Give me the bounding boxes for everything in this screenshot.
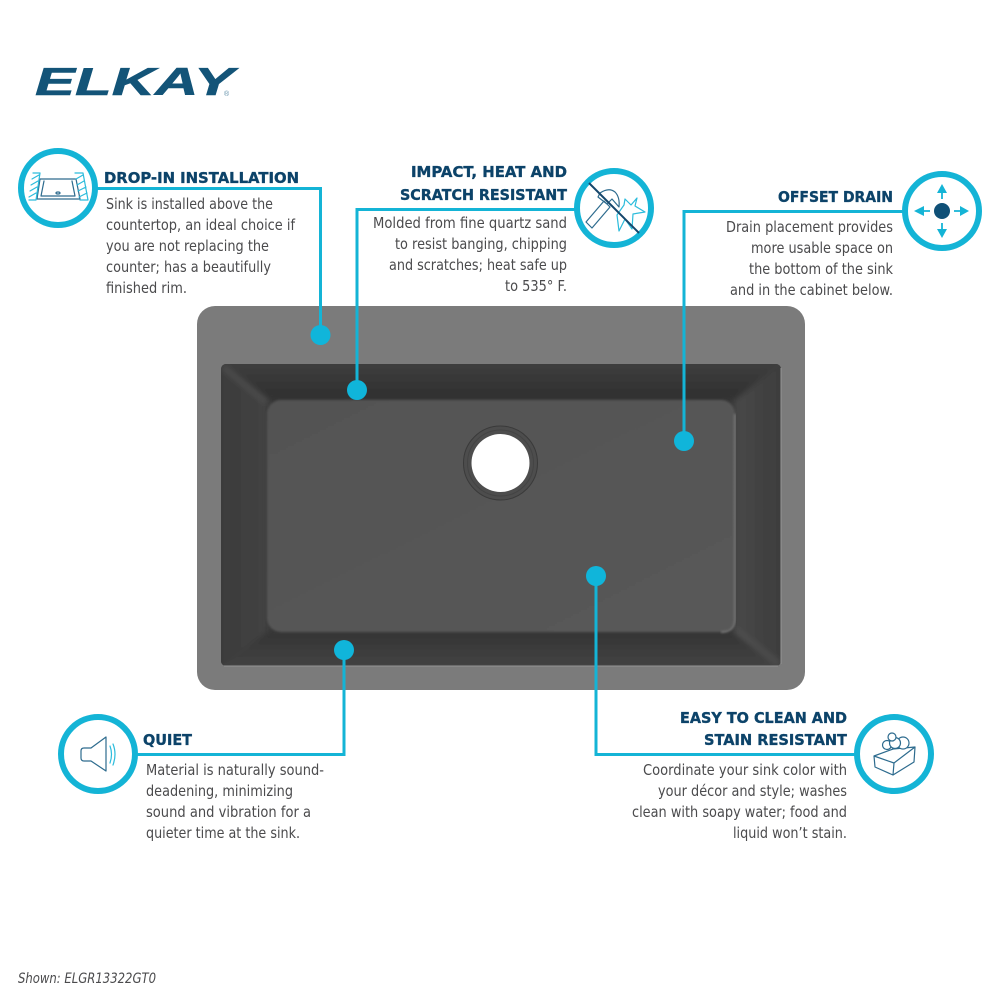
text: quiet: Material is naturally sound- bbox=[146, 761, 324, 779]
connector: offset drain bbox=[684, 212, 905, 441]
text: offset drain: the bottom of the sink bbox=[749, 260, 893, 278]
text: impact: to 535° F. bbox=[505, 277, 567, 295]
footnote: model shown: Shown: ELGR13322GT0 bbox=[18, 971, 156, 987]
heading: offset drain: OFFSET DRAIN bbox=[778, 188, 893, 206]
marker: impact bbox=[347, 380, 367, 400]
heading: drop-in: DROP-IN INSTALLATION bbox=[104, 169, 299, 187]
icon: soap bar with bubbles bbox=[857, 717, 931, 791]
text: quiet: deadening, minimizing bbox=[146, 782, 293, 800]
text: impact: and scratches; heat safe up bbox=[389, 256, 567, 274]
sink product image bbox=[197, 306, 805, 690]
text: quiet bbox=[146, 761, 324, 842]
heading: quiet: QUIET bbox=[143, 731, 193, 749]
text: easy to clean: clean with soapy water; food and bbox=[632, 803, 847, 821]
text: drop-in bbox=[106, 195, 296, 297]
heading: easy to clean bbox=[680, 709, 848, 749]
text: impact: Molded from fine quartz sand bbox=[373, 214, 567, 232]
text: drop-in: you are not replacing the bbox=[106, 237, 269, 255]
callout: offset drain bbox=[674, 174, 979, 451]
heading: impact bbox=[400, 163, 568, 204]
marker: drop-in bbox=[310, 325, 330, 345]
text: drop-in: Sink is installed above the bbox=[106, 195, 273, 213]
text: drop-in: counter; has a beautifully bbox=[106, 258, 271, 276]
icon: hammer crossed out bbox=[577, 171, 651, 245]
callout: impact, heat and scratch resistant bbox=[347, 163, 651, 400]
text: offset drain: Drain placement provides bbox=[726, 218, 893, 236]
marker: easy to clean bbox=[586, 566, 606, 586]
text: drop-in: countertop, an ideal choice if bbox=[106, 216, 296, 234]
callout: drop-in installation bbox=[21, 151, 330, 345]
text: offset drain bbox=[726, 218, 893, 299]
logo: Elkay bbox=[35, 61, 239, 104]
logo: Elkay: ® bbox=[224, 90, 230, 98]
text: impact bbox=[373, 214, 567, 295]
icon: drop-in sink bbox=[21, 151, 95, 225]
connector: easy to clean bbox=[596, 576, 857, 754]
text: easy to clean: liquid won’t stain. bbox=[733, 824, 847, 842]
connector: quiet bbox=[136, 650, 344, 754]
text: easy to clean: your décor and style; washes bbox=[658, 782, 847, 800]
text: quiet: sound and vibration for a bbox=[146, 803, 311, 821]
text: offset drain: and in the cabinet below. bbox=[730, 281, 893, 299]
text: easy to clean: Coordinate your sink color with bbox=[643, 761, 847, 779]
heading: impact: IMPACT, HEAT AND bbox=[411, 163, 567, 181]
marker: offset drain bbox=[674, 431, 694, 451]
heading: easy to clean: EASY TO CLEAN AND bbox=[680, 709, 847, 727]
icon: speaker bbox=[61, 717, 135, 791]
text: impact: to resist banging, chipping bbox=[395, 235, 567, 253]
heading: impact: SCRATCH RESISTANT bbox=[400, 186, 568, 204]
heading: easy to clean: STAIN RESISTANT bbox=[704, 731, 848, 749]
logo: Elkay: ELKAY bbox=[35, 61, 239, 104]
marker: quiet bbox=[334, 640, 354, 660]
connector: impact bbox=[357, 210, 577, 390]
icon: drain with four arrows bbox=[905, 174, 979, 248]
drain bbox=[464, 426, 538, 500]
connector: drop-in bbox=[96, 188, 320, 335]
text: drop-in: finished rim. bbox=[106, 279, 187, 297]
text: quiet: quieter time at the sink. bbox=[146, 824, 300, 842]
text: offset drain: more usable space on bbox=[751, 239, 893, 257]
text: easy to clean bbox=[632, 761, 847, 842]
callout: quiet bbox=[61, 640, 354, 842]
callout: easy to clean and stain resistant bbox=[586, 566, 931, 842]
